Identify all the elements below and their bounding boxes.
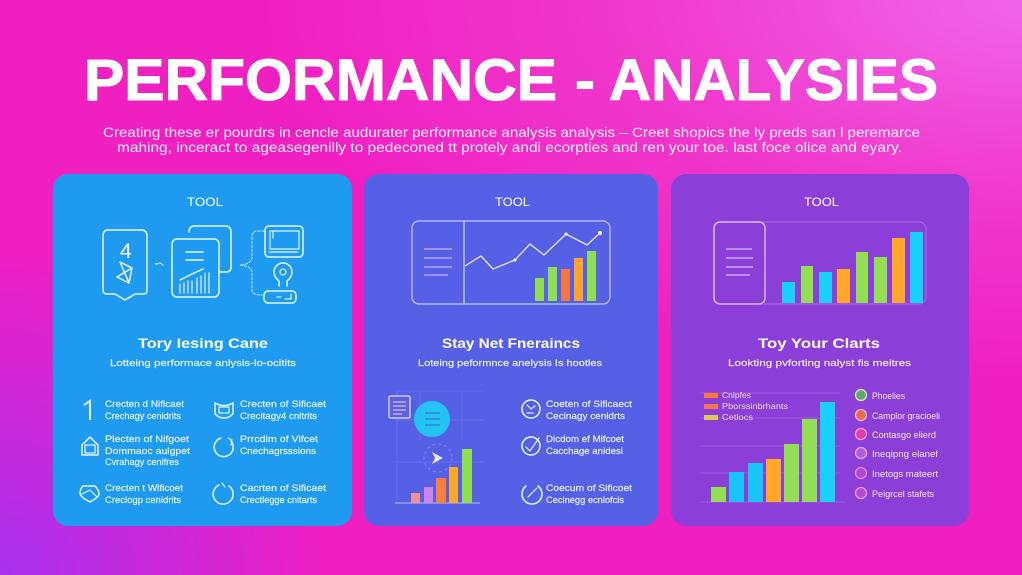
chart: dashboard bars [714, 222, 926, 304]
feature item 3: Cvrahagy cenifres [105, 457, 179, 468]
icon: document note [389, 396, 410, 418]
feature item 2: Crecten of Sificaet [240, 399, 326, 410]
subtitle text: mahing, inceract to ageasegenilly to pedeconed tt protely andi ecorpties and ren your toe. last foce olice and eyary. [117, 140, 902, 155]
subtitle text [103, 125, 920, 155]
feature item 5: Crecten t Wificoet [105, 483, 183, 494]
panel: tool three [671, 174, 969, 526]
feature item 2 [215, 399, 326, 422]
feature item 1: Crecten d Nificaet [105, 399, 184, 410]
card subheading: Lotteing performace anlysis-lo-ocitits [110, 358, 296, 369]
card heading: Stay Net Fneraincs [442, 335, 580, 351]
feature item 5 [80, 483, 183, 506]
arrow: dashed bracket [240, 231, 264, 295]
feature item 1 [522, 399, 632, 422]
icon: cyan circle [414, 401, 450, 437]
panel heading: tool label: TOOL [804, 195, 839, 209]
icon: report documents [172, 226, 231, 297]
panel heading: tool label: TOOL [187, 195, 223, 209]
feature item 1: Crechagy cenidrits [105, 411, 181, 422]
chart: growth bar chart [700, 390, 845, 502]
feature item 3: Coecum of Sificoet [546, 483, 632, 494]
legend list: Ineqipng elanef [872, 449, 938, 460]
feature item 2: Dicdom ef Mifcoet [546, 434, 624, 445]
card subheading: Lookting pvforting nalyst fis meitres [728, 358, 911, 369]
chart legend: Cnlpfes [722, 390, 751, 400]
icon: play arrow [432, 452, 443, 464]
card heading: Toy Your Clarts [758, 335, 880, 351]
card heading: Tory Iesing Cane [138, 335, 268, 351]
title: PERFORMANCE [84, 48, 557, 113]
feature item 3: Plecten of Nifgoet [105, 434, 189, 445]
legend list: Camplor gracioeli [872, 411, 940, 422]
subtitle text: Creating these er pourdrs in cencle audurater performance analysis analysis – Creet shopics the ly preds san l peremarce [103, 125, 920, 140]
icon: shield with number: 4 [120, 240, 132, 263]
legend list: Peigrcel stafets [872, 489, 934, 500]
feature item 1 [84, 399, 184, 422]
feature item 3: Cecinegg ecnlofcis [546, 495, 624, 506]
chart legend: Cetlocs [722, 412, 753, 422]
panel: tool two [364, 174, 658, 526]
feature item 6 [213, 483, 326, 506]
legend list: Phoelies [872, 391, 905, 402]
icon: shield with number [103, 230, 147, 300]
legend list: Contasgo elierd [872, 430, 936, 441]
feature item 3 [522, 483, 632, 506]
feature item 3 [82, 434, 190, 468]
icon: light bulb with pill [264, 263, 296, 303]
arrow: connector dash [156, 263, 163, 265]
feature item 6: Cacrten of Sificaet [240, 483, 326, 494]
feature item 4 [214, 434, 318, 457]
feature item 6: Crectlegge cnitarts [240, 495, 317, 506]
feature item 2: Cacchage anidesi [546, 446, 623, 457]
feature item 1: Cecinagy cenidrts [546, 411, 625, 422]
feature item 5: Creclogp cenidrits [105, 495, 181, 506]
icon: monitor [265, 226, 303, 257]
feature item 1: Coeten of Sificaect [546, 399, 632, 410]
legend list: Inetogs mateert [872, 469, 938, 480]
feature item 2: Crecitagy4 cnitrits [240, 411, 317, 422]
chart: growth bars with icons [389, 391, 483, 503]
title: - [575, 48, 595, 113]
feature item 4: Cnechagrsssions [240, 446, 316, 457]
feature item 3: Dommaoc aulgpet [105, 446, 190, 457]
feature item 2 [522, 434, 624, 457]
title: ANALYSIES [609, 48, 938, 113]
chart: dashboard line and bars [412, 221, 610, 304]
feature item 4: Prrcdim of Vifcet [240, 434, 318, 445]
chart legend [704, 390, 788, 422]
card subheading: Loteing peformnce anelysis Is hootles [418, 358, 602, 369]
panel: tool one [53, 174, 352, 526]
panel heading: tool label: TOOL [495, 195, 530, 209]
chart legend: Pborssinbrhants [722, 401, 788, 411]
legend list [856, 390, 940, 500]
